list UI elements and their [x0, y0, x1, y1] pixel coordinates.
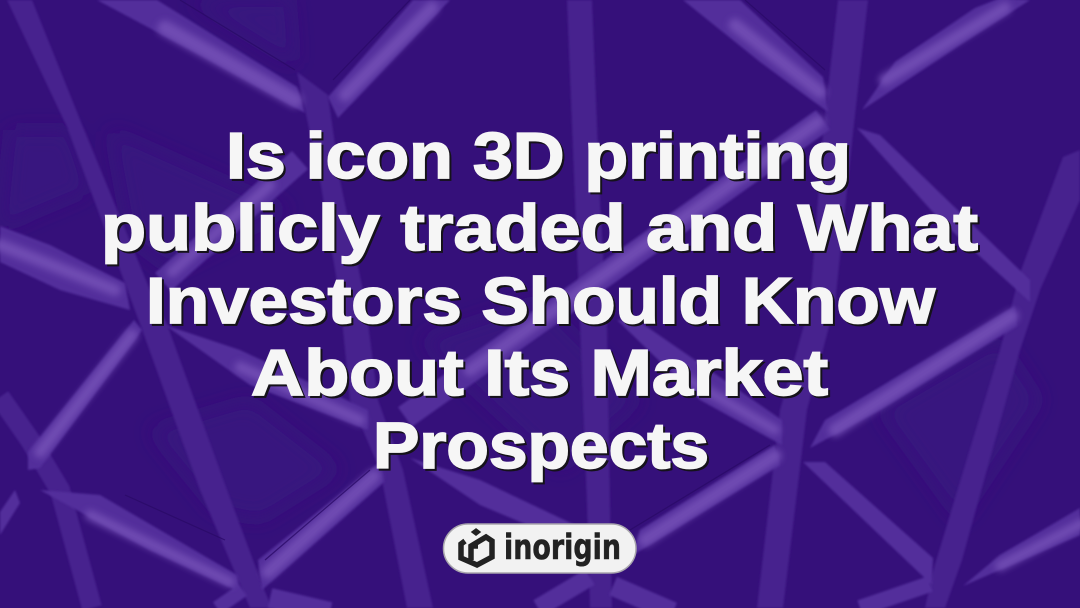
title: Is icon 3D printing	[226, 119, 851, 192]
logo badge	[444, 524, 636, 573]
title	[101, 119, 978, 482]
title: About Its Market	[251, 336, 828, 409]
logo pill	[444, 524, 636, 573]
title: publicly traded and What	[101, 191, 978, 264]
icon: inorigin cube	[461, 529, 492, 565]
title: Investors Should Know	[146, 264, 935, 337]
wordmark: inorigin	[504, 528, 621, 568]
title: Prospects	[373, 409, 709, 482]
